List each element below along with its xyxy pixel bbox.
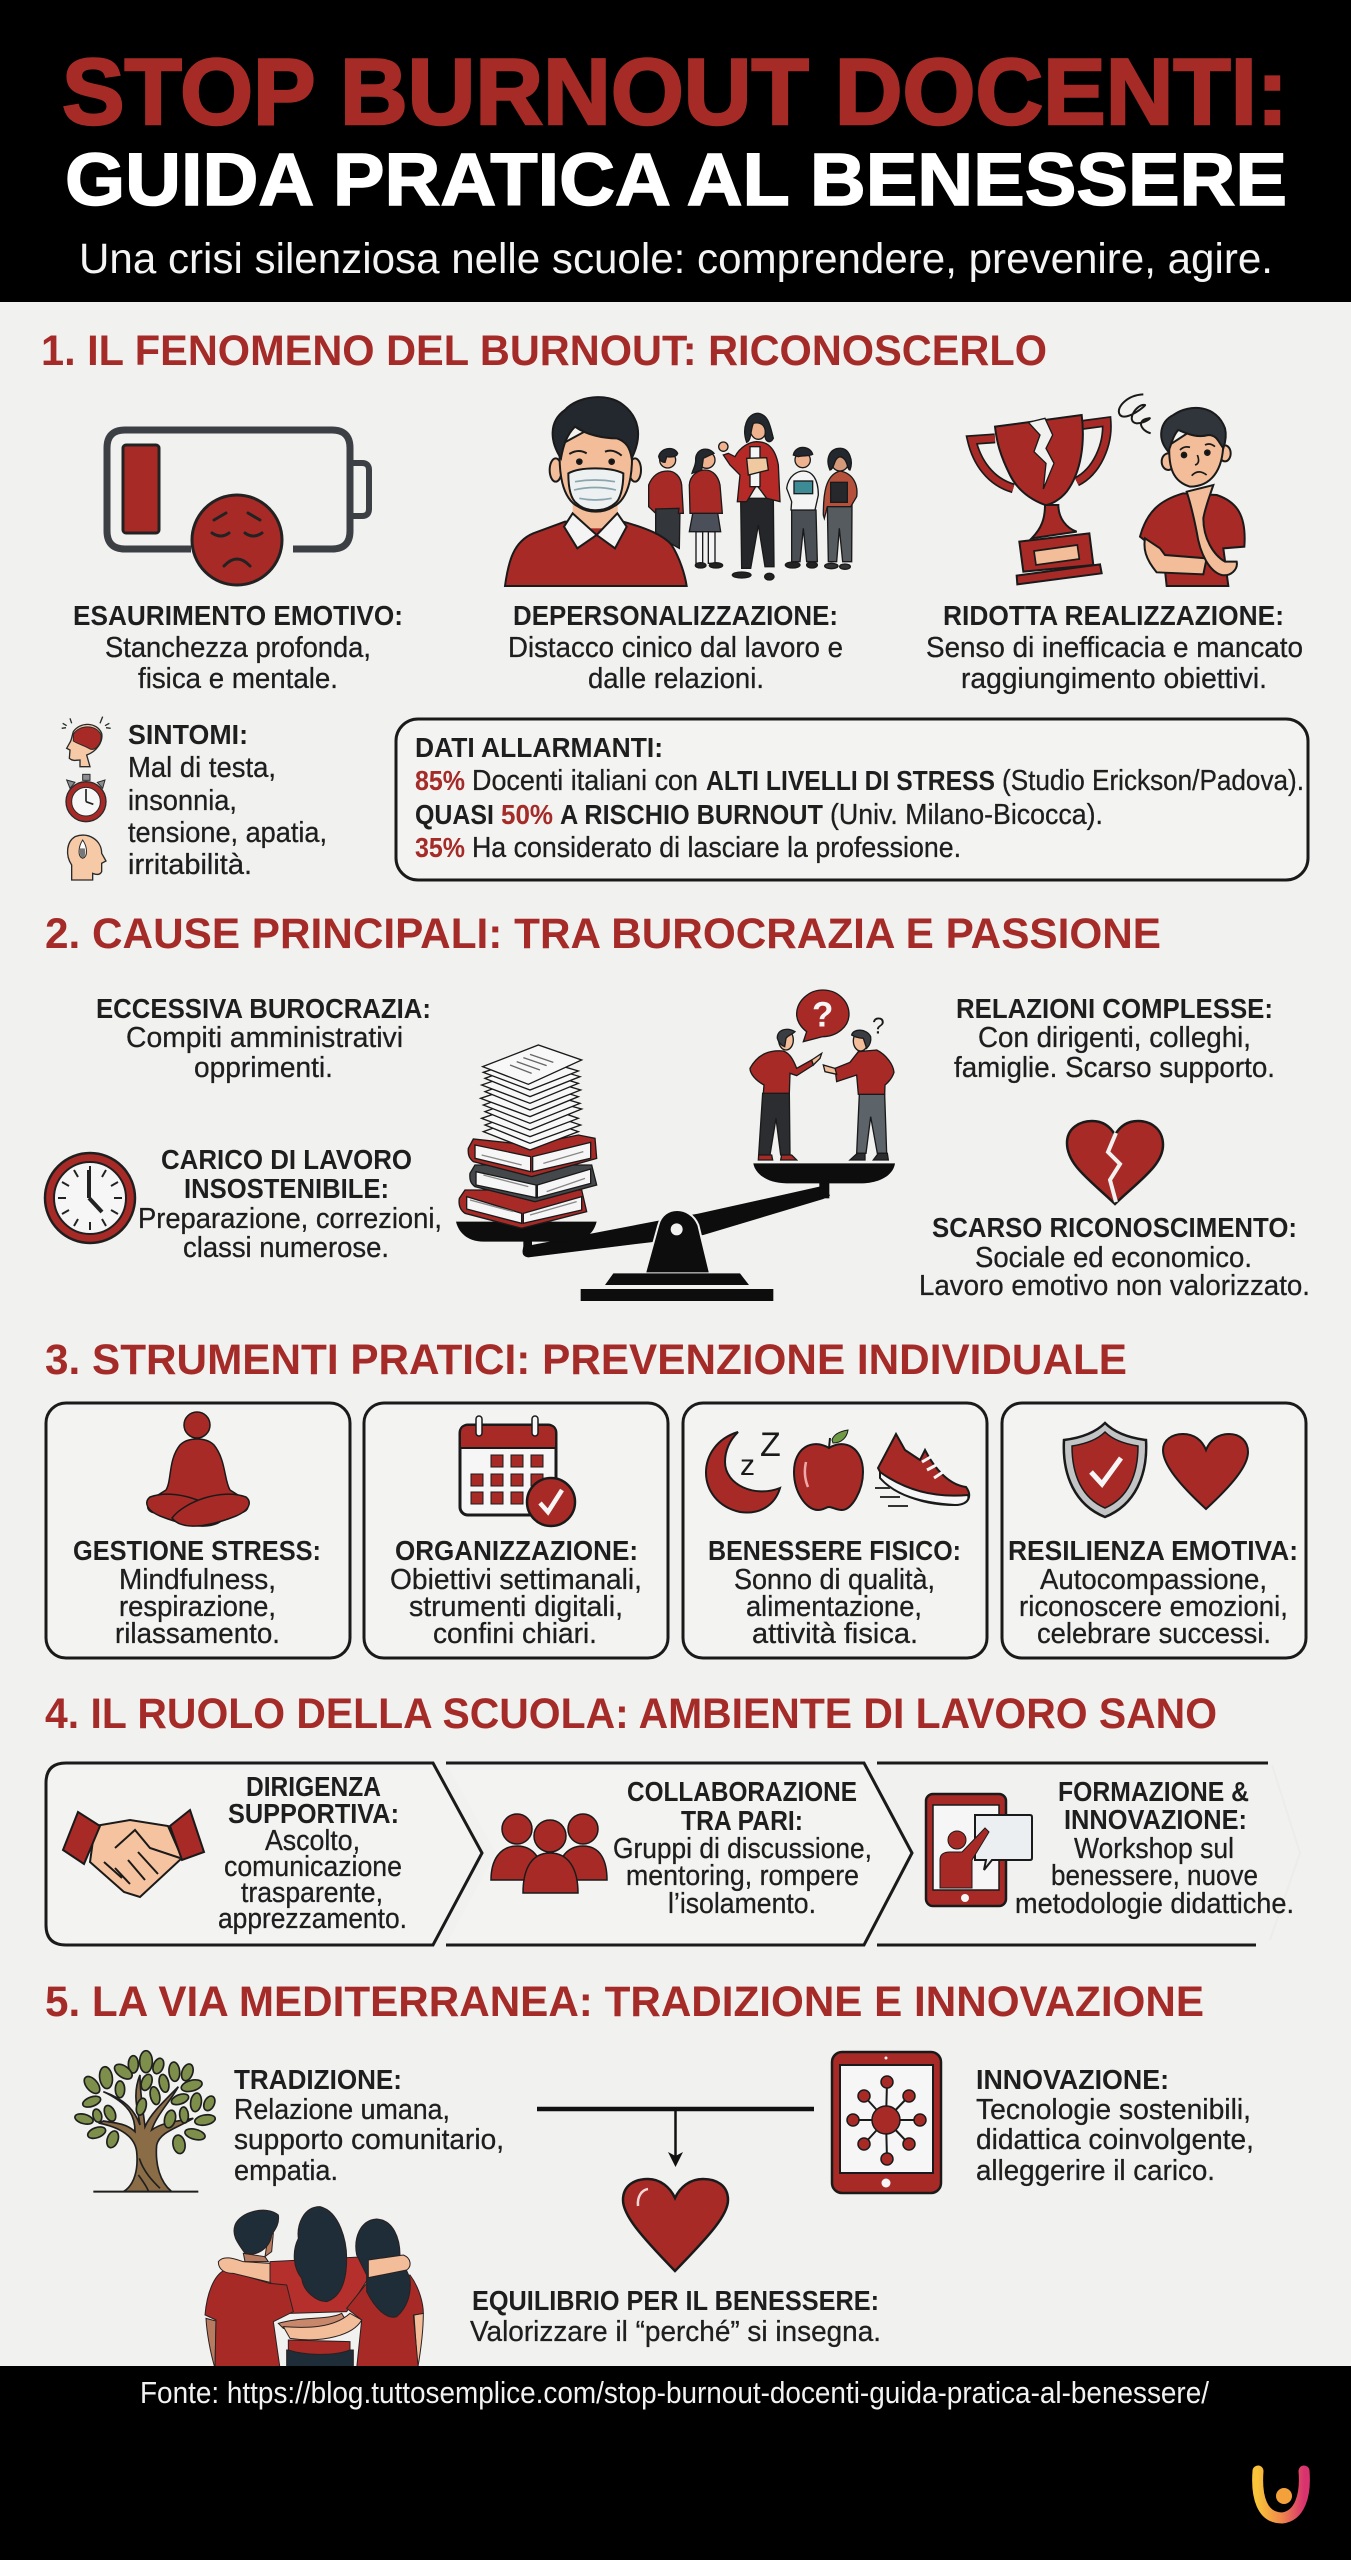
block: esaurimento emotivo: ESAURIMENTO EMOTIVO: [73,600,403,631]
block: scarso riconoscimento: SCARSO RICONOSCIMENTO: [932,1212,1297,1243]
panel: dati allarmanti: 50% [501,799,553,830]
icon: broken heart [1067,1121,1163,1204]
icon: wall clock [45,1153,135,1243]
thinking person [1140,408,1245,586]
header band [0,0,1351,302]
panel: dirigenza supportiva: SUPPORTIVA: [228,1798,399,1829]
chart icon: scale with books and people [456,990,895,1301]
panel: collaborazione tra pari: Gruppi di discussione, [613,1833,872,1865]
person right [823,1030,894,1160]
panel: gestione stress: Mindfulness, [119,1564,276,1596]
block: ridotta realizzazione: raggiungimento obiettivi. [961,663,1267,695]
block: innovazione [976,2064,1254,2187]
panel: benessere fisico: Sonno di qualità, [734,1564,935,1596]
icon: heart balance [623,2179,728,2271]
subtitle: Una crisi silenziosa nelle scuole: comprendere, prevenire, agire. [79,235,1273,283]
block: sintomi [128,719,327,881]
block: relazioni complesse: RELAZIONI COMPLESSE: [956,993,1273,1024]
student boy white shirt [785,447,818,568]
panel: collaborazione tra pari: COLLABORAZIONE [627,1776,857,1807]
block: ridotta realizzazione [926,600,1303,695]
block: carico di lavoro [138,1144,442,1264]
block: ridotta realizzazione: Senso di inefficacia e mancato [926,632,1303,664]
icon: moon [706,1426,781,1513]
panel: collaborazione tra pari: mentoring, rompere [626,1860,859,1892]
panel: formazione e innovazione: Workshop sul [1074,1833,1234,1865]
block: scarso riconoscimento: Lavoro emotivo non valorizzato. [919,1270,1310,1302]
block: eccessiva burocrazia: ECCESSIVA BUROCRAZIA: [96,993,431,1024]
block: equilibrio [470,2285,881,2348]
block: carico di lavoro: CARICO DI LAVORO [161,1144,412,1175]
panel: dati allarmanti: 85% [415,765,465,796]
panel: dati allarmanti: Docenti italiani con [472,765,698,797]
heading section 1: 1. IL FENOMENO DEL BURNOUT: RICONOSCERLO [41,327,1047,375]
books [459,1135,597,1228]
small question mark: ? [872,1013,885,1039]
block: esaurimento emotivo: fisica e mentale. [138,663,338,695]
block: equilibrio: EQUILIBRIO PER IL BENESSERE: [472,2285,879,2316]
panel: benessere fisico [683,1403,987,1658]
panel: organizzazione: ORGANIZZAZIONE: [395,1535,638,1566]
panel: dirigenza supportiva: Ascolto, [265,1825,360,1857]
panel: resilienza emotiva: RESILIENZA EMOTIVA: [1008,1535,1298,1566]
icon: head with tinnitus [68,835,106,880]
heading section 3: 3. STRUMENTI PRATICI: PREVENZIONE INDIVIDUALE [45,1336,1127,1384]
heading section 5: 5. LA VIA MEDITERRANEA: TRADIZIONE E INNOVAZIONE [45,1978,1204,2026]
block: innovazione: didattica coinvolgente, [976,2124,1254,2156]
block: tradizione: supporto comunitario, [234,2124,504,2156]
panel: dati allarmanti: DATI ALLARMANTI: [415,732,663,763]
block: eccessiva burocrazia: opprimenti. [194,1052,333,1084]
block: esaurimento emotivo [73,600,403,695]
block: tradizione [234,2064,504,2187]
panel: collaborazione tra pari: l’isolamento. [668,1888,816,1920]
panel: formazione e innovazione: benessere, nuove [1051,1860,1258,1892]
block: depersonalizzazione [508,600,843,695]
paper stack [481,1045,582,1150]
person left [750,1029,822,1160]
panel: dati allarmanti: (Studio Erickson/Padova). [1002,765,1304,797]
block: tradizione: empatia. [234,2155,338,2187]
icon: tablet with network [832,2052,941,2193]
block: innovazione: INNOVAZIONE: [976,2064,1169,2095]
block: carico di lavoro: Preparazione, correzioni, [138,1203,442,1235]
panel: collaborazione tra pari [446,1763,912,1945]
block: relazioni complesse [954,993,1275,1084]
panel: organizzazione: strumenti digitali, [409,1591,623,1623]
panel: formazione e innovazione [877,1763,1300,1945]
block: sintomi: SINTOMI: [128,719,248,750]
icon: headache [62,717,111,767]
block: carico di lavoro: INSOSTENIBILE: [184,1173,389,1204]
block: tradizione: Relazione umana, [234,2094,450,2126]
logo [1258,2471,1304,2518]
block: sintomi: irritabilità. [128,849,252,881]
student boy [649,449,683,548]
icon: moon: z [740,1449,755,1482]
block: tradizione: TRADIZIONE: [234,2064,402,2095]
panel: dirigenza supportiva: DIRIGENZA [246,1771,381,1802]
block: equilibrio: Valorizzare il “perché” si insegna. [470,2316,881,2348]
icon: masked teacher and group of students [505,397,857,586]
symptom icons [62,717,111,880]
swirl [1119,394,1151,433]
masked man [505,397,687,586]
icon: calendar [460,1416,575,1526]
block: sintomi: Mal di testa, [128,752,276,784]
icon: tablet with presenter [926,1794,1032,1906]
panel: dati allarmanti: 35% [415,832,465,863]
panel: benessere fisico: alimentazione, [746,1591,922,1623]
block: innovazione: alleggerire il carico. [976,2155,1215,2187]
icon: handshake [63,1810,204,1897]
icon: group of people [491,1814,607,1893]
block: eccessiva burocrazia [96,993,431,1084]
icon: heart [1163,1434,1248,1509]
block: scarso riconoscimento [919,1212,1310,1302]
block: depersonalizzazione: dalle relazioni. [588,663,764,695]
heading section 2: 2. CAUSE PRINCIPALI: TRA BUROCRAZIA E PASSIONE [45,910,1161,958]
panel: resilienza emotiva [1002,1403,1306,1658]
block: depersonalizzazione: DEPERSONALIZZAZIONE: [513,600,838,631]
icon: apple [794,1430,863,1510]
student girl [689,449,723,568]
panel: organizzazione: confini chiari. [433,1618,597,1650]
panel: organizzazione: Obiettivi settimanali, [390,1564,642,1596]
panel: dirigenza supportiva [46,1763,482,1945]
panel: formazione e innovazione: metodologie didattiche. [1015,1888,1294,1920]
footer band [0,2366,1351,2560]
panel: resilienza emotiva: celebrare successi. [1037,1618,1271,1650]
panel: dirigenza supportiva: apprezzamento. [218,1903,407,1935]
icon: shield [1064,1423,1146,1517]
block: carico di lavoro: classi numerose. [183,1232,389,1264]
teacher [719,413,780,580]
panel: gestione stress: rilassamento. [115,1618,280,1650]
icon: olive tree [74,2051,217,2192]
icon: moon: Z [760,1426,781,1464]
block: sintomi: tensione, apatia, [128,817,327,849]
speech bubble with question mark [797,990,849,1042]
title line 2: GUIDA PRATICA AL BENESSERE [65,138,1287,221]
block: sintomi: insonnia, [128,785,237,817]
icon: running shoe [875,1434,969,1506]
panel: resilienza emotiva: riconoscere emozioni, [1019,1591,1288,1623]
panel: gestione stress [46,1403,350,1658]
panel: gestione stress: respirazione, [119,1591,276,1623]
panel: formazione e innovazione: INNOVAZIONE: [1064,1804,1247,1835]
block: esaurimento emotivo: Stanchezza profonda, [105,632,371,664]
arrow: tradition and innovation to balance [537,2109,814,2167]
scale [456,1163,895,1301]
panel: dirigenza supportiva: trasparente, [241,1877,383,1909]
icon: broken trophy and sad person [972,394,1245,586]
speech bubble with question mark: ? [812,996,833,1035]
panel: benessere fisico: BENESSERE FISICO: [708,1535,961,1566]
source text: Fonte: https://blog.tuttosemplice.com/stop-burnout-docenti-guida-pratica-al-benessere/ [140,2375,1209,2410]
panel: collaborazione tra pari: TRA PARI: [681,1805,803,1836]
block: relazioni complesse: famiglie. Scarso supporto. [954,1052,1275,1084]
panel: dati allarmanti: A RISCHIO BURNOUT [560,799,823,830]
block: relazioni complesse: Con dirigenti, colleghi, [978,1022,1251,1054]
student woman orange [823,448,857,569]
title line 1: STOP BURNOUT DOCENTI: [62,39,1288,144]
panel: dati allarmanti: (Univ. Milano-Bicocca). [830,799,1103,831]
block: eccessiva burocrazia: Compiti amministrativi [126,1022,403,1054]
panel: dati allarmanti [396,719,1308,880]
panel: dati allarmanti: ALTI LIVELLI DI STRESS [706,765,995,796]
block: scarso riconoscimento: Sociale ed economico. [975,1242,1252,1274]
panel: dati allarmanti: Ha considerato di lasciare la professione. [472,832,961,864]
icon: empty battery with sad face [107,430,369,585]
heading section 4: 4. IL RUOLO DELLA SCUOLA: AMBIENTE DI LAVORO SANO [45,1690,1217,1738]
block: innovazione: Tecnologie sostenibili, [976,2094,1251,2126]
icon: three people hugging [205,2207,423,2368]
panel: formazione e innovazione: FORMAZIONE & [1058,1776,1249,1807]
icon: stopwatch [66,774,106,822]
panel: dati allarmanti: QUASI [415,799,494,830]
panel: dirigenza supportiva: comunicazione [224,1851,402,1883]
panel: organizzazione [364,1403,668,1658]
panel: benessere fisico: attività fisica. [752,1618,918,1650]
icon: meditation [147,1412,249,1526]
block: ridotta realizzazione: RIDOTTA REALIZZAZIONE: [943,600,1284,631]
panel: gestione stress: GESTIONE STRESS: [73,1535,321,1566]
block: depersonalizzazione: Distacco cinico dal lavoro e [508,632,843,664]
panel: resilienza emotiva: Autocompassione, [1040,1564,1267,1596]
